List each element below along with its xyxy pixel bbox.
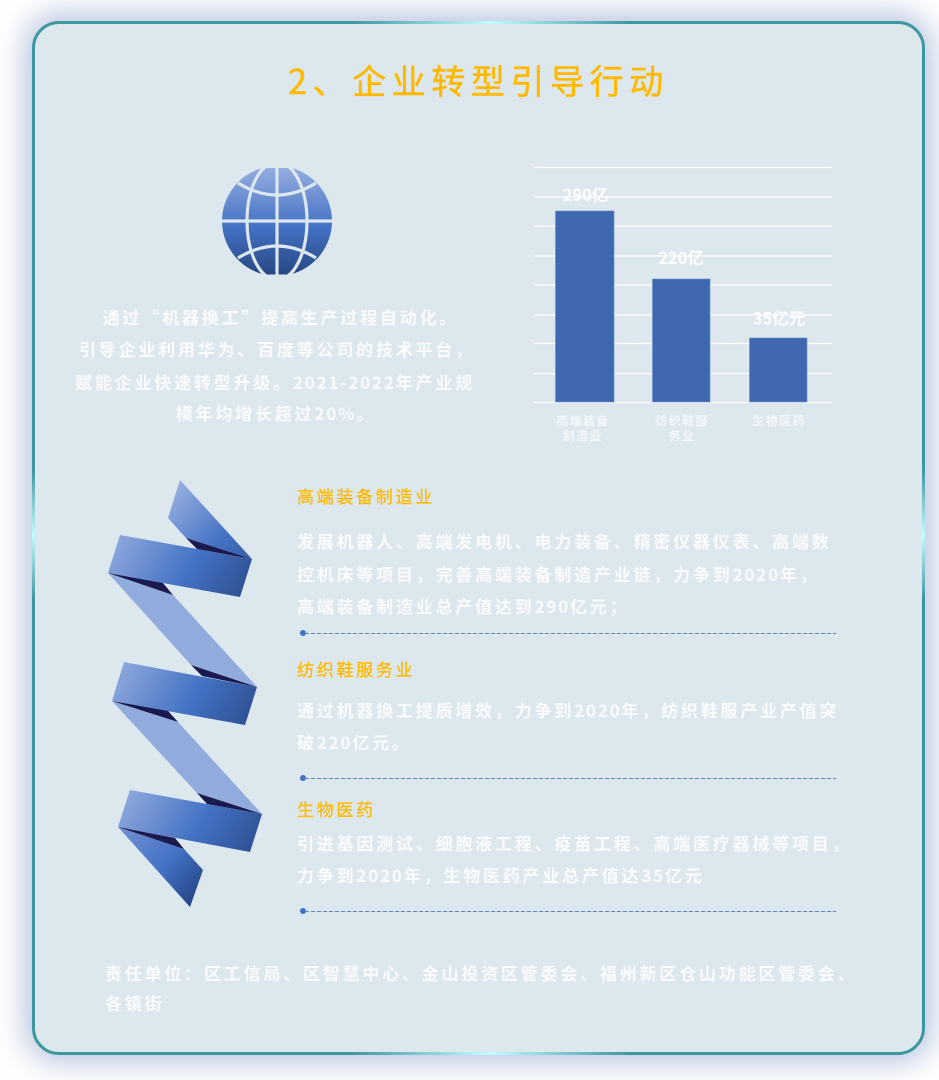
value labels: 220亿 — [658, 245, 704, 269]
icon: globe — [222, 168, 332, 274]
left border highlight — [32, 470, 35, 600]
body text: 发展机器人、高端发电机、电力装备、精密仪器仪表、高端数 — [297, 528, 832, 553]
category labels: 务业 — [669, 427, 695, 444]
value labels: 35亿元 — [753, 306, 805, 330]
right border highlight — [922, 470, 925, 600]
category labels: 制造业 — [563, 427, 603, 444]
section: textile — [297, 656, 839, 754]
footer: responsible units: 责任单位：区工信局、区智慧中心、金山投资区管委会、福州新区仓山功能区管委会、 — [105, 960, 857, 985]
bars — [556, 211, 807, 402]
text block: intro: 通过“机器换工”提高生产过程自动化。 — [103, 304, 459, 329]
value labels — [563, 182, 805, 330]
text block: intro: 模年均增长超过20%。 — [176, 400, 376, 425]
bottom border highlight — [350, 1052, 630, 1055]
divider dot line — [300, 630, 836, 636]
section: biomedicine — [297, 796, 851, 887]
title: 2、企业转型引导行动 — [288, 55, 669, 104]
icon: folded ribbon — [108, 480, 262, 907]
body text — [297, 697, 839, 754]
divider dot line — [300, 775, 836, 781]
body text — [297, 528, 832, 618]
body text: 控机床等项目，完善高端装备制造产业链，力争到2020年， — [297, 561, 820, 586]
text block: intro: 引导企业利用华为、百度等公司的技术平台， — [79, 336, 475, 361]
body text: 高端装备制造业总产值达到290亿元； — [297, 593, 630, 618]
footer: responsible units — [105, 960, 857, 1015]
body text: 通过机器换工提质增效，力争到2020年，纺织鞋服产业产值突 — [297, 697, 839, 722]
text block: intro — [75, 304, 475, 425]
body text: 力争到2020年，生物医药产业总产值达35亿元 — [297, 862, 705, 887]
category labels: 高端装备 — [556, 412, 610, 429]
bar chart — [534, 166, 832, 444]
heading: 高端装备制造业 — [297, 483, 435, 508]
top border highlight — [350, 21, 630, 24]
divider dot line — [300, 908, 836, 914]
heading: 纺织鞋服务业 — [297, 656, 415, 681]
category labels: 生物医药 — [752, 412, 806, 429]
value labels: 290亿 — [563, 182, 608, 206]
section: high-end equipment — [297, 483, 832, 618]
category labels: 纺织鞋服 — [655, 412, 709, 429]
heading: 生物医药 — [297, 796, 376, 821]
body text — [297, 830, 851, 887]
category labels — [556, 412, 806, 444]
body text: 破220亿元。 — [297, 729, 412, 754]
footer: responsible units: 各镇街 — [105, 990, 164, 1015]
text block: intro: 赋能企业快速转型升级。2021-2022年产业规 — [75, 369, 475, 394]
body text: 引进基因测试、细胞液工程、疫苗工程、高端医疗器械等项目， — [297, 830, 851, 855]
